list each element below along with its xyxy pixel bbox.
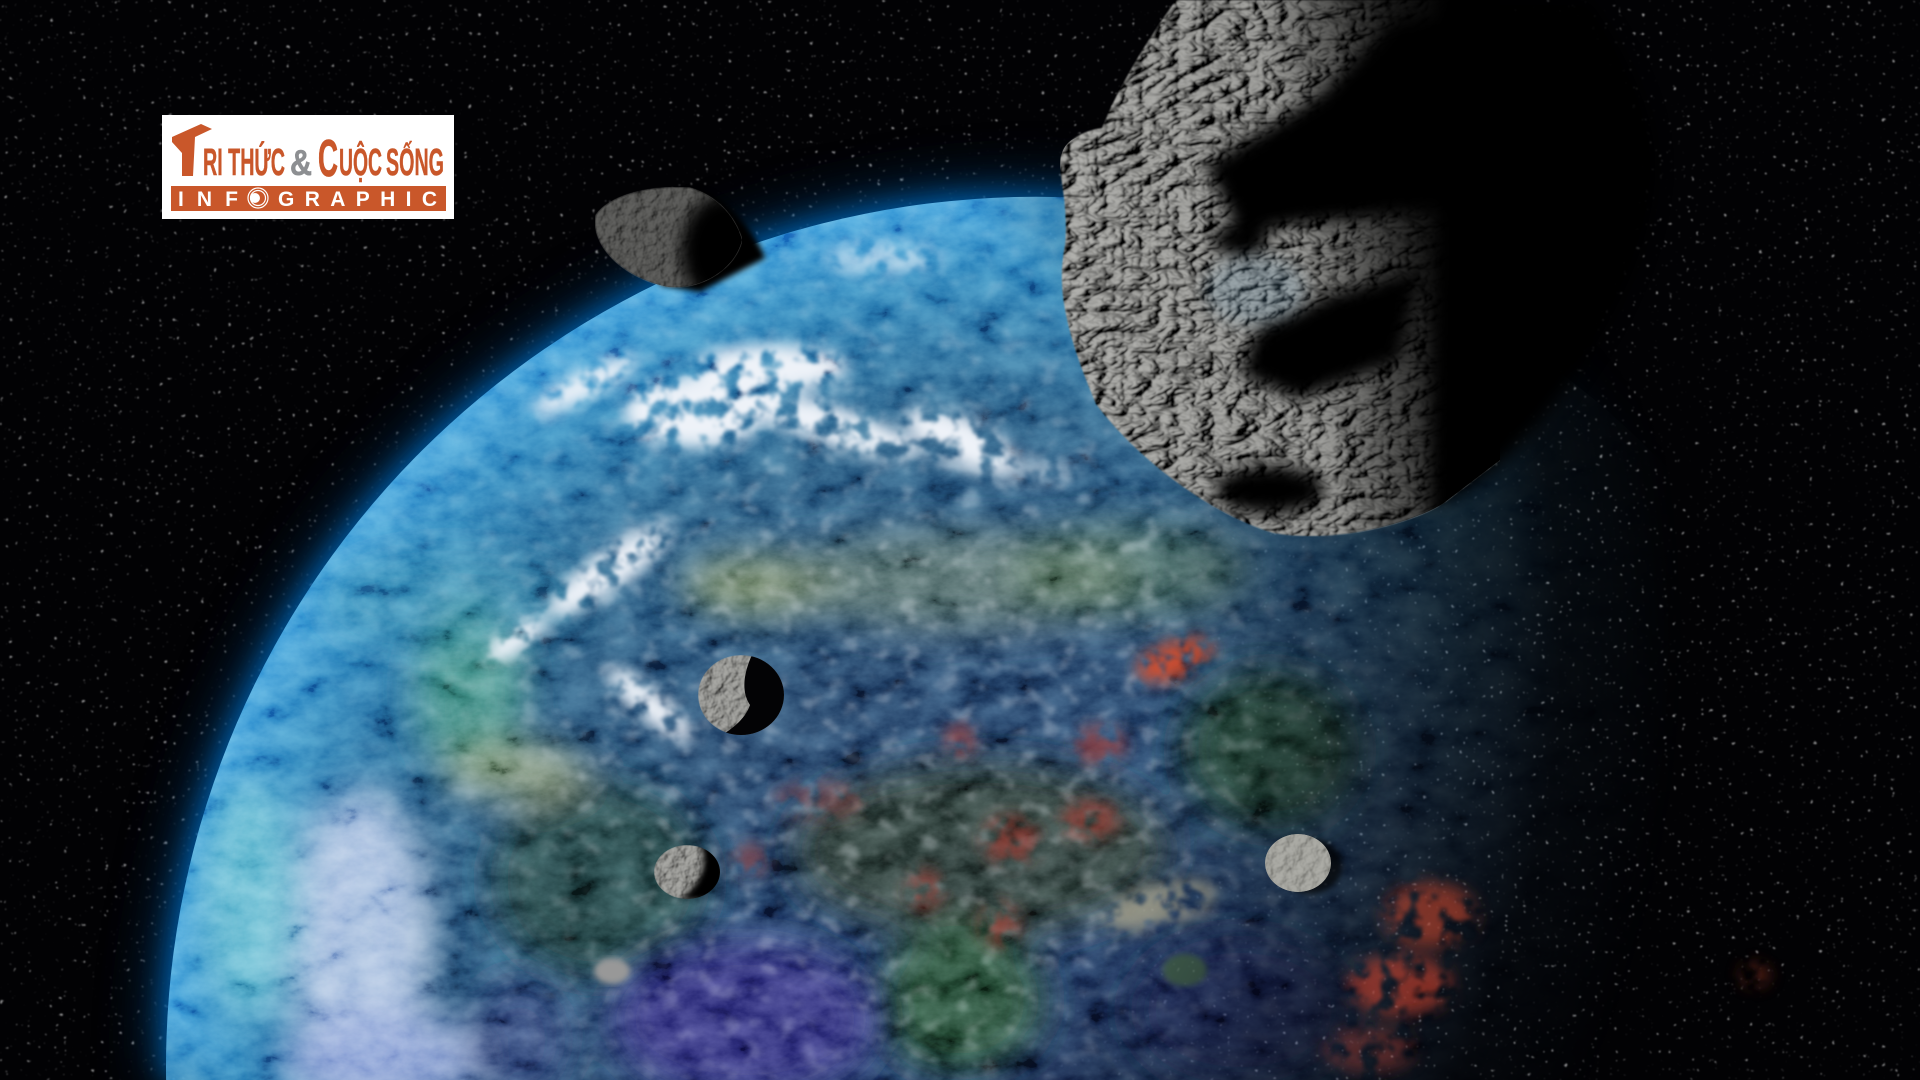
cloud speckle <box>352 197 1376 1080</box>
logo text: UỘC: UỘC <box>339 139 382 184</box>
large asteroid <box>1060 0 1660 536</box>
logo text: RI THỨC: RI THỨC <box>203 140 285 184</box>
clouds <box>476 242 1080 752</box>
asteroid surface <box>1060 0 1500 536</box>
asteroid: centre <box>698 655 790 735</box>
logo text: SỐNG: SỐNG <box>386 139 444 184</box>
land masses <box>415 520 1360 1075</box>
embers on dark side <box>1324 883 1769 1072</box>
asteroid: upper left <box>595 187 769 306</box>
planet Earth with atmosphere, fading into night side <box>124 154 1609 1080</box>
logo text: C: C <box>318 130 338 188</box>
oceans and polar haze <box>200 550 1350 1080</box>
logo banner text: INF: INF <box>178 188 238 211</box>
logo text: ampersand: & <box>290 142 312 183</box>
fires <box>732 629 1219 947</box>
logo banner text: GRAPHIC: GRAPHIC <box>278 188 437 211</box>
asteroid: small bottom <box>594 958 630 984</box>
logo banner <box>171 186 446 211</box>
tan coastline <box>1098 869 1222 941</box>
asteroid: lower right <box>1265 834 1342 894</box>
asteroid: lower centre <box>654 845 725 900</box>
logo: Tri Thức & Cuộc Sống Infographic <box>162 115 454 219</box>
asteroid shadows and craters <box>1197 19 1500 526</box>
asteroid bump <box>1061 136 1109 184</box>
small island <box>1163 954 1207 986</box>
faint blue tint on rock <box>1205 256 1305 324</box>
logo icon: T roof <box>172 124 212 176</box>
logo icon: rings <box>248 188 268 208</box>
surface texture <box>166 196 1514 1080</box>
asteroid shadow side <box>1300 0 1656 520</box>
atmosphere glow <box>124 154 1065 1080</box>
planet disc <box>166 196 1546 1080</box>
